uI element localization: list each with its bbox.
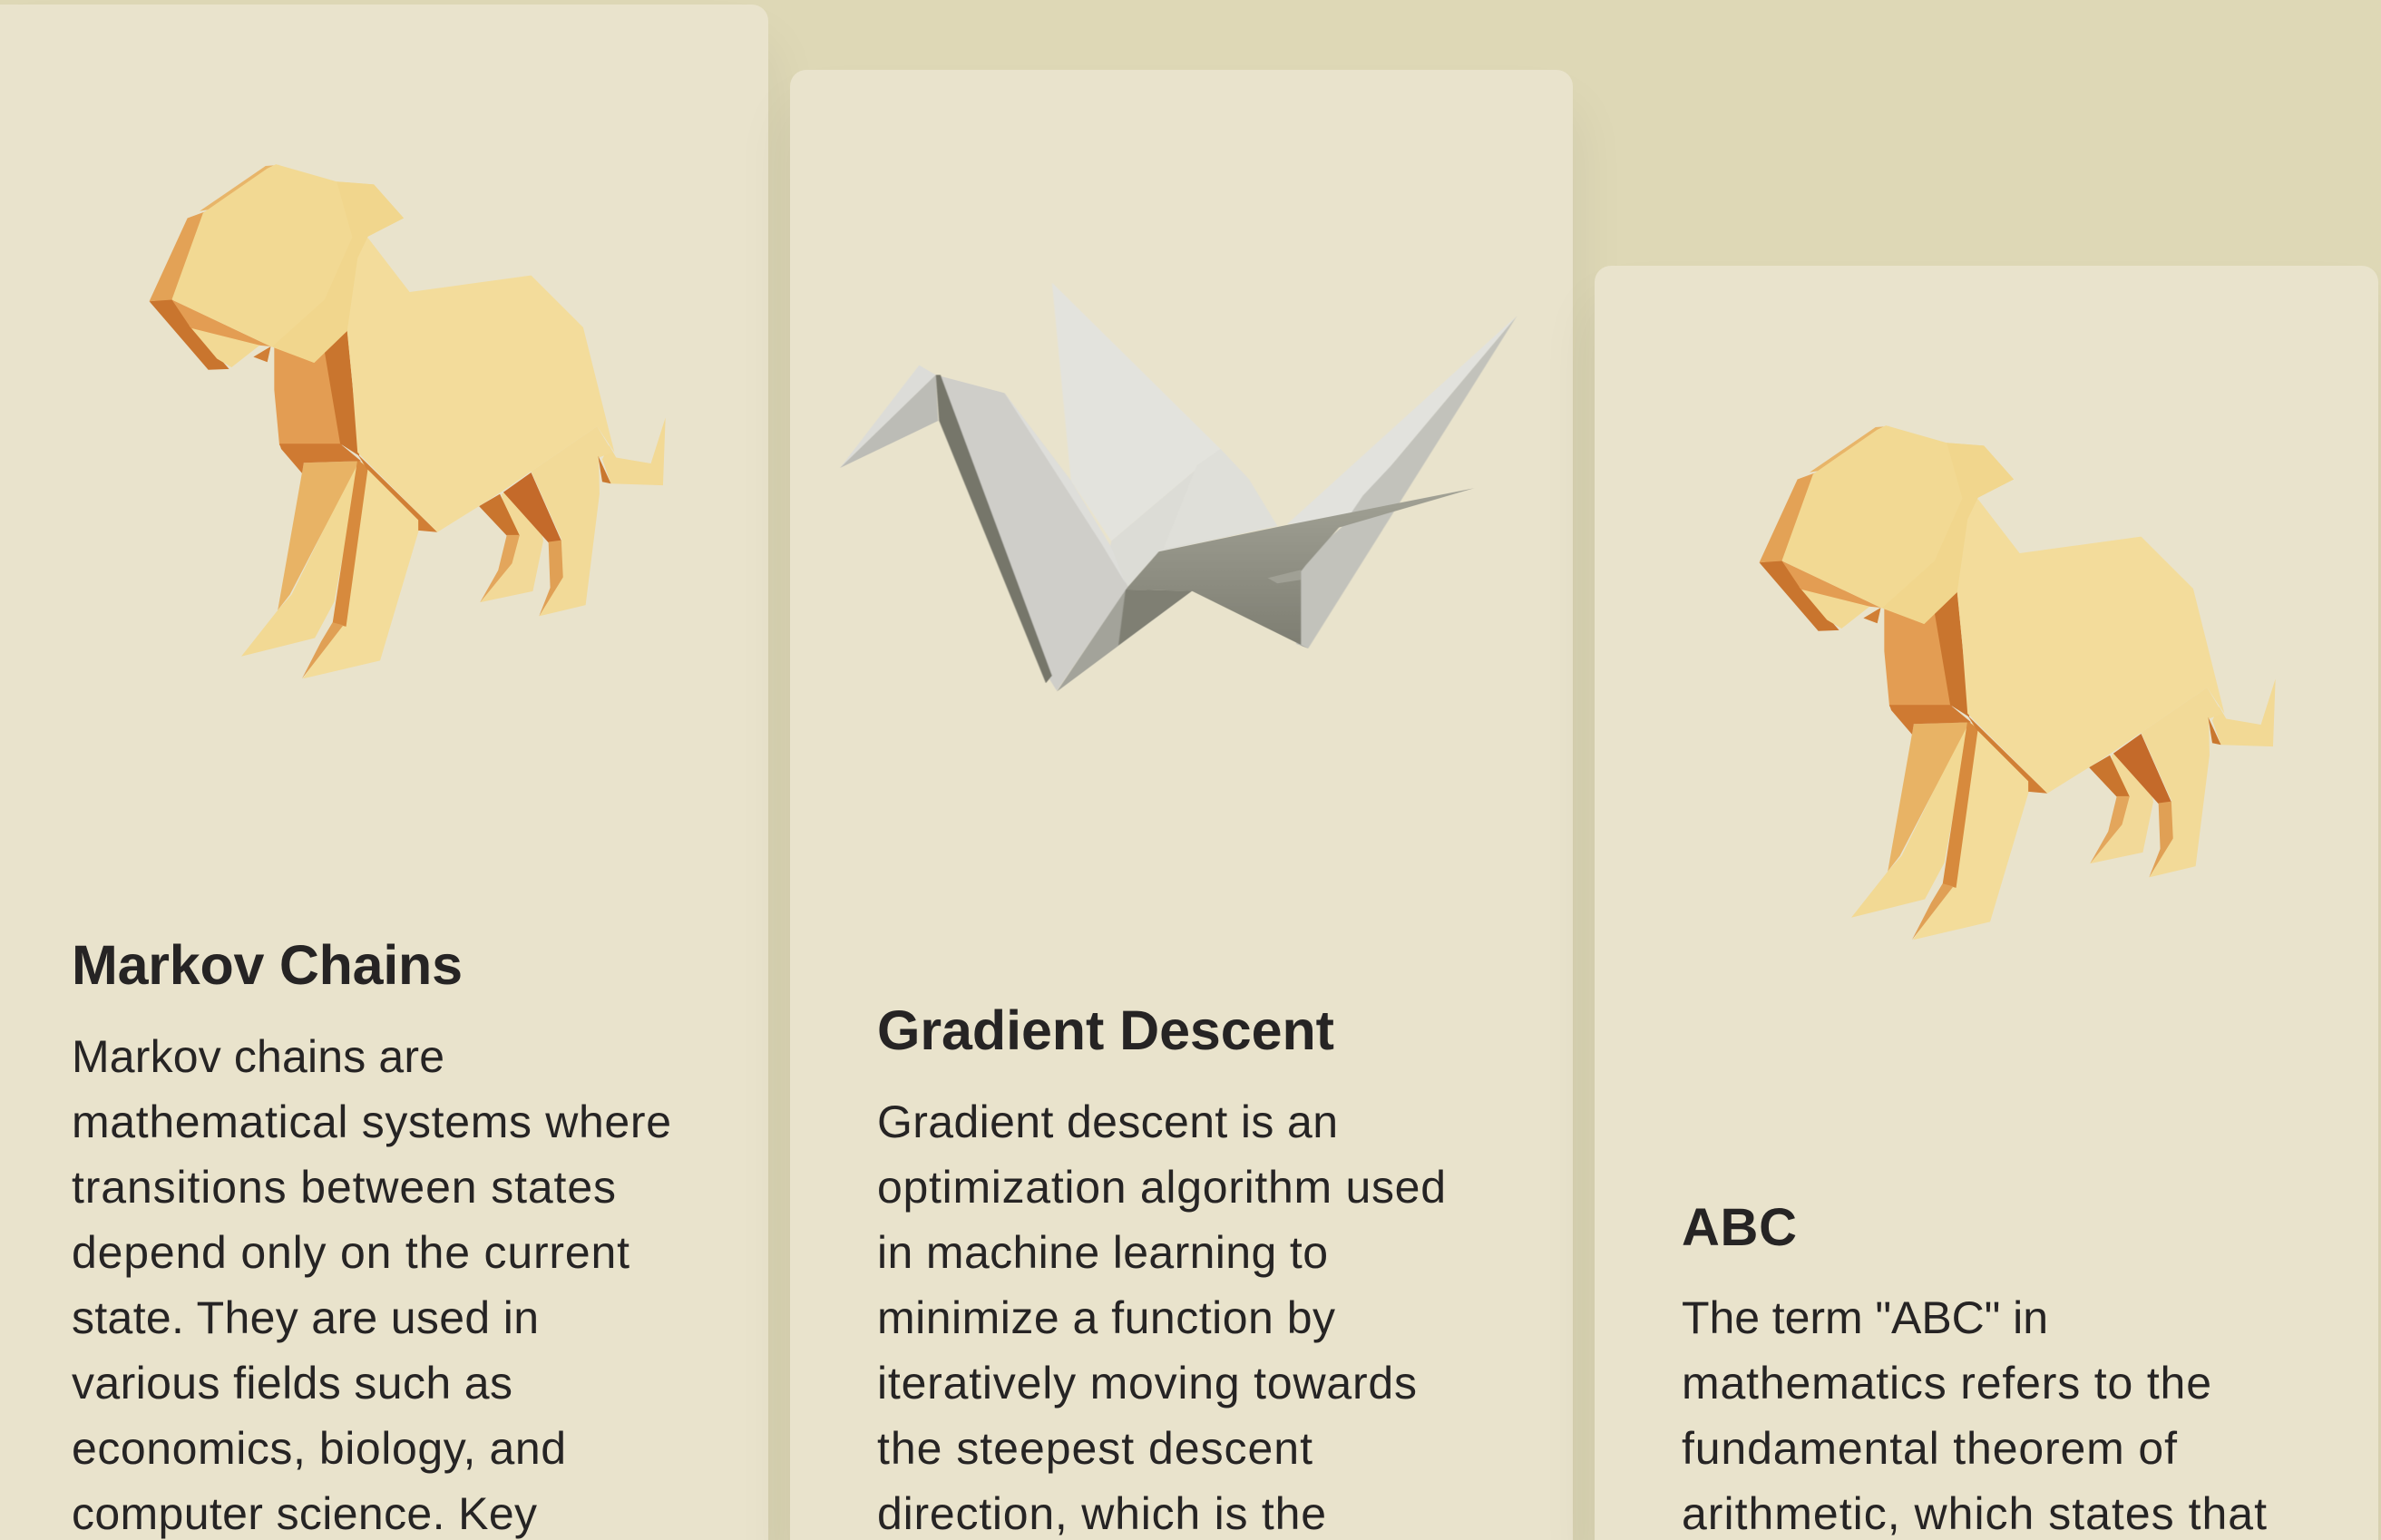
heading: ABC: ABC bbox=[1682, 1198, 1797, 1257]
panel: ABC card bbox=[1595, 266, 2378, 1540]
text block: Gradient descent description: in machine learning to bbox=[877, 1227, 1328, 1278]
text block: ABC description bbox=[1682, 1292, 2267, 1539]
text block: Markov chains description: state. They are used in bbox=[72, 1292, 539, 1343]
text block: Gradient descent description: optimization algorithm used bbox=[877, 1162, 1446, 1213]
text block: Gradient descent description: Gradient descent is an bbox=[877, 1097, 1338, 1147]
text block: ABC description: The term "ABC" in bbox=[1682, 1292, 2048, 1343]
text block: Markov chains description: depend only on the current bbox=[72, 1227, 629, 1278]
text block: Markov chains description: economics, biology, and bbox=[72, 1423, 566, 1474]
illustration: origami dog bbox=[1760, 425, 2276, 940]
text block: Gradient descent description: minimize a function by bbox=[877, 1292, 1335, 1343]
text block: Markov chains description: transitions between states bbox=[72, 1162, 616, 1213]
text block: Markov chains description: mathematical systems where bbox=[72, 1097, 671, 1147]
illustration: origami dog bbox=[150, 164, 666, 678]
text block: Gradient descent description bbox=[877, 1097, 1446, 1539]
heading: Gradient Descent: Gradient Descent bbox=[877, 999, 1334, 1061]
text block: Gradient descent description: the steepest descent bbox=[877, 1423, 1312, 1474]
panel: Gradient Descent card bbox=[790, 70, 1573, 1540]
text block: Markov chains description: computer science. Key bbox=[72, 1488, 537, 1539]
text block: Markov chains description: various fields such as bbox=[72, 1358, 512, 1408]
text block: ABC description: arithmetic, which states that bbox=[1682, 1488, 2267, 1539]
text block: ABC description: fundamental theorem of bbox=[1682, 1423, 2177, 1474]
panel: Markov Chains card bbox=[0, 5, 768, 1540]
text block: Markov chains description: Markov chains are bbox=[72, 1031, 444, 1082]
text block: Gradient descent description: direction, which is the bbox=[877, 1488, 1326, 1539]
text block: Gradient descent description: iteratively moving towards bbox=[877, 1358, 1417, 1408]
text block: Markov chains description bbox=[72, 1031, 671, 1539]
heading: Markov Chains: Markov Chains bbox=[72, 934, 463, 996]
text block: ABC description: mathematics refers to the bbox=[1682, 1358, 2211, 1408]
illustration: origami crane bbox=[840, 283, 1517, 692]
